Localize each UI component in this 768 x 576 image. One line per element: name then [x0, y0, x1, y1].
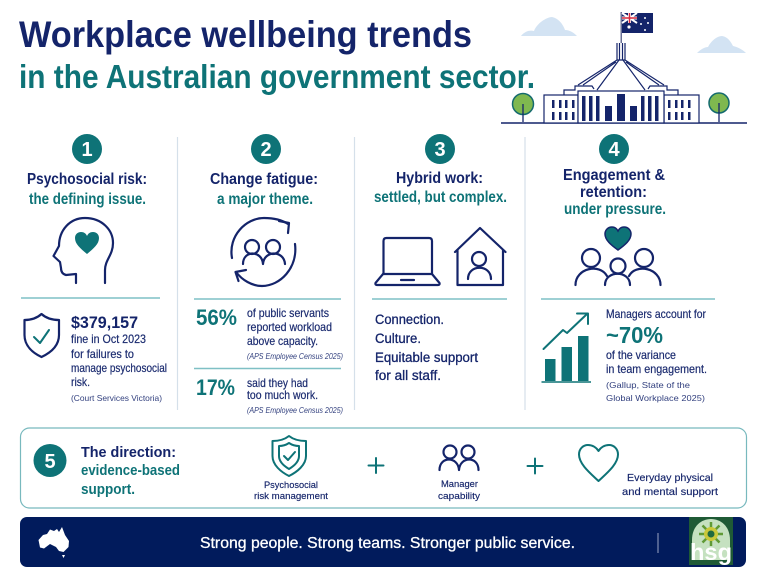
statistic: 17%: 17% [196, 375, 235, 400]
number badge 5 [34, 444, 66, 477]
icon: rising bar chart [542, 314, 591, 382]
item: manager capability: capability [438, 491, 480, 502]
icon: people with heart [576, 227, 660, 285]
fine statistic: risk. [71, 375, 90, 389]
fine statistic: manage psychosocial [71, 361, 167, 375]
item: manager capability: Manager [441, 479, 478, 490]
icon: cycle arrows around people [231, 218, 295, 286]
heading 2 [210, 171, 318, 208]
number badge 2 [251, 134, 281, 164]
panel: hybrid work [372, 134, 507, 383]
item: everyday physical and mental support: Everyday physical [627, 472, 713, 484]
number badge 1: 1 [81, 139, 93, 161]
number badge 3 [425, 134, 455, 164]
plus sign [528, 458, 542, 474]
footer banner [20, 517, 746, 567]
statistic: 17%: said they had [247, 376, 308, 390]
statistic: 17% [196, 375, 343, 415]
icon: map of Australia [38, 527, 69, 558]
panel: change fatigue [194, 134, 343, 415]
statistic: 70%: (Gallup, State of the [606, 380, 690, 390]
heading 2: Change fatigue: [210, 171, 318, 188]
fine statistic: for failures to [71, 347, 134, 361]
number badge 4 [599, 134, 629, 164]
heading 4 [563, 167, 666, 218]
panel: the direction [20, 428, 746, 508]
number badge 5: 5 [44, 451, 56, 473]
logo: hsg: hsg [690, 539, 732, 565]
heading 5: evidence-based [81, 462, 180, 479]
statistic: 56% [196, 305, 343, 361]
heading 2: a major theme. [217, 191, 313, 208]
statistic: 56%: of public servants [247, 306, 329, 320]
fine statistic: (Court Services Victoria) [71, 393, 162, 403]
text: hybrid work priorities: for all staff. [375, 368, 441, 383]
text: hybrid work priorities [375, 312, 478, 383]
title [19, 14, 535, 95]
statistic: 56%: (APS Employee Census 2025) [247, 351, 343, 361]
fine statistic: fine in Oct 2023 [71, 332, 146, 346]
number badge 4: 4 [608, 139, 620, 161]
statistic: 17%: too much work. [247, 388, 318, 402]
item: everyday physical and mental support: and mental support [622, 486, 718, 498]
number badge 1 [72, 134, 102, 164]
logo: hsg [689, 517, 733, 565]
title: Workplace wellbeing trends [19, 14, 472, 55]
heading 3: settled, but complex. [374, 189, 507, 206]
heading 1: Psychosocial risk: [27, 171, 147, 188]
icon: laptop [375, 238, 440, 285]
statistic: 56%: above capacity. [247, 334, 318, 348]
statistic: 70%: Managers account for [606, 307, 706, 321]
illustration: Parliament House with flag, trees and clouds [501, 12, 747, 123]
statistic: 70%: of the variance [606, 348, 676, 362]
icon: house with person [455, 228, 506, 285]
statistic: 70%: ~70% [606, 322, 663, 348]
heading 4: retention: [580, 184, 647, 201]
heading 3: Hybrid work: [396, 170, 483, 187]
statistic: 17%: (APS Employee Census 2025) [247, 405, 343, 415]
heading 4: Engagement & [563, 167, 665, 184]
heading 5 [81, 444, 180, 498]
fine statistic [71, 313, 167, 403]
heading 4: under pressure. [564, 201, 666, 218]
fine statistic: $379,157 [71, 313, 138, 332]
item: psychosocial risk management: risk management [254, 491, 328, 502]
statistic: 70% [606, 307, 707, 403]
panel: engagement and retention [541, 134, 715, 403]
heading 5: support. [81, 481, 135, 498]
text: hybrid work priorities: Culture. [375, 331, 421, 346]
text: hybrid work priorities: Equitable support [375, 350, 478, 365]
item: psychosocial risk management: Psychosocial [264, 480, 318, 491]
title: in the Australian government sector. [19, 58, 535, 95]
heading 1 [27, 171, 147, 208]
statistic: 56%: reported workload [247, 320, 332, 334]
footer tagline: Strong people. Strong teams. Stronger public service. [200, 535, 575, 552]
statistic: 70%: Global Workplace 2025) [606, 393, 705, 403]
plus sign [368, 458, 384, 473]
number badge 3: 3 [434, 139, 446, 161]
heading 5: The direction: [81, 444, 176, 461]
item: manager capability [438, 446, 480, 502]
panel: psychosocial risk [21, 134, 167, 403]
icon: head with heart [54, 218, 113, 283]
statistic: 70%: in team engagement. [606, 362, 707, 376]
statistic: 56%: 56% [196, 305, 237, 330]
heading 3 [374, 170, 507, 206]
text: hybrid work priorities: Connection. [375, 312, 444, 327]
item: everyday physical and mental support [579, 445, 718, 498]
heading 1: the defining issue. [29, 191, 146, 208]
icon: shield with check [24, 314, 59, 357]
number badge 2: 2 [260, 139, 272, 161]
item: psychosocial risk management [254, 436, 328, 502]
